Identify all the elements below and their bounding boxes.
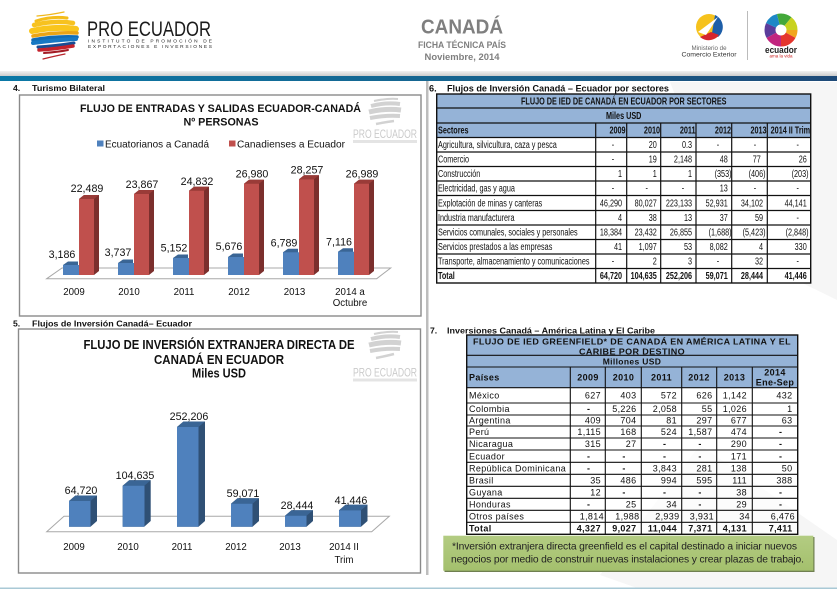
table: greenfield FDI by destination: 11,044 xyxy=(648,523,677,533)
axis labels: 2010 xyxy=(117,542,139,553)
table: greenfield FDI by destination: Países xyxy=(469,372,500,382)
chart title: Nº PERSONAS xyxy=(184,116,259,128)
table: greenfield FDI by destination: 3,931 xyxy=(690,511,714,521)
axis labels: 2009 xyxy=(63,542,85,553)
table: greenfield FDI by destination: 63 xyxy=(782,416,792,426)
axis labels: 2013 xyxy=(284,287,305,298)
table: greenfield FDI by destination: 297 xyxy=(696,416,712,426)
table: greenfield FDI by destination: - xyxy=(663,439,666,449)
table: FDI by sector: 32 xyxy=(755,255,763,267)
table: greenfield FDI by destination: 2010 xyxy=(613,372,634,382)
axis labels: 2013 xyxy=(279,542,301,553)
data labels: 26,989 xyxy=(346,168,378,180)
table: FDI by sector: - xyxy=(682,182,684,194)
table: FDI by sector: Industria manufacturera xyxy=(438,212,515,223)
axis labels: 2014 II xyxy=(329,542,359,553)
data labels: 3,186 xyxy=(49,249,75,261)
table: greenfield FDI by destination: - xyxy=(587,451,590,461)
table: greenfield FDI by destination: 4,131 xyxy=(723,523,747,533)
table: greenfield FDI by destination: - xyxy=(698,439,702,449)
table: greenfield FDI by destination: 2,058 xyxy=(653,404,677,414)
table: greenfield FDI by destination: 12 xyxy=(590,487,601,497)
table: greenfield FDI by destination: - xyxy=(663,451,666,461)
table: greenfield FDI by destination: 524 xyxy=(661,427,677,437)
table: FDI by sector: - xyxy=(797,182,799,194)
callout: greenfield definition: negocios por medio de construir nuevas instalaciones y crear plazas de trabajo. xyxy=(451,554,804,566)
table: FDI by sector: 1 xyxy=(688,168,692,179)
table: greenfield FDI by destination: - xyxy=(622,487,626,497)
legend xyxy=(97,138,345,150)
table: FDI by sector: 59,071 xyxy=(706,270,728,281)
logo: Ecuador ama la vida: ecuador xyxy=(765,45,797,55)
heading 7: Inversiones Canadá – América Latina y El Caribe xyxy=(447,326,655,336)
watermark logo: PRO ECUADOR xyxy=(353,368,417,380)
table: FDI by sector: 3 xyxy=(688,255,692,267)
data labels: 3,737 xyxy=(105,247,131,259)
data labels: 23,867 xyxy=(126,179,158,191)
heading 4: 4. xyxy=(13,83,20,93)
table: FDI by sector: (203) xyxy=(792,168,809,179)
logo tagline: EXPORTACIONES E INVERSIONES xyxy=(88,44,212,50)
table: FDI by sector: Agricultura, silvicultura, caza y pesca xyxy=(438,139,557,150)
background watermark xyxy=(600,82,837,589)
table: greenfield FDI by destination: Brasil xyxy=(469,475,494,485)
axis labels: 2011 xyxy=(174,287,194,298)
table: FDI by sector: 26 xyxy=(799,153,807,165)
table: greenfield FDI by destination: 486 xyxy=(620,475,636,485)
table: greenfield FDI by destination: Honduras xyxy=(469,499,511,509)
axis labels: Trim xyxy=(334,555,354,566)
table: FDI by sector: - xyxy=(754,139,756,150)
table: greenfield FDI by destination: 1,587 xyxy=(688,427,712,437)
table: greenfield FDI by destination: 627 xyxy=(585,390,601,400)
table: FDI by sector: 13 xyxy=(720,182,728,194)
table: FDI by sector: Transporte, almacenamiento y comunicaciones xyxy=(438,255,590,267)
table: FDI by sector: 26,855 xyxy=(670,226,692,238)
table: greenfield FDI by destination: - xyxy=(779,439,782,449)
table: greenfield FDI by destination: 6,476 xyxy=(771,511,795,521)
axis labels: 2010 xyxy=(118,287,140,298)
table: greenfield FDI by destination: 171 xyxy=(731,451,747,461)
table: FDI by sector: 53 xyxy=(684,241,692,252)
bar chart: FDI xyxy=(69,422,368,527)
table: FDI by sector: - xyxy=(797,212,799,223)
table: greenfield FDI by destination: - xyxy=(698,499,702,509)
axis labels xyxy=(63,287,367,309)
table: greenfield FDI by destination: 281 xyxy=(696,463,712,473)
table: FDI by sector: 80,027 xyxy=(635,197,657,209)
table: greenfield FDI by destination: 2014 xyxy=(764,368,786,378)
data labels: 22,489 xyxy=(71,183,103,195)
watermark logo: PRO ECUADOR xyxy=(353,129,417,141)
table: FDI by sector: (5,423) xyxy=(743,226,766,238)
table: greenfield FDI by destination: Colombia xyxy=(469,404,510,414)
table: greenfield FDI by destination: 2012 xyxy=(688,372,710,382)
table: greenfield FDI by destination: México xyxy=(469,390,500,400)
table: greenfield FDI by destination: 111 xyxy=(732,475,747,485)
table: greenfield FDI by destination: 2011 xyxy=(651,372,672,382)
axis labels: 2011 xyxy=(172,542,192,553)
callout: greenfield definition xyxy=(443,536,814,572)
table: greenfield FDI by destination: 25 xyxy=(626,499,636,509)
table: FDI by sector: - xyxy=(612,255,614,267)
data labels: 5,152 xyxy=(161,242,187,254)
table: greenfield FDI by destination: 2009 xyxy=(577,372,599,382)
table: greenfield FDI by destination: - xyxy=(779,451,782,461)
logo: Pro Ecuador xyxy=(32,12,212,59)
data labels: 41,446 xyxy=(335,495,367,507)
table: greenfield FDI by destination: 2013 xyxy=(724,372,745,382)
logo wordmark: PRO ECUADOR xyxy=(87,18,211,41)
table: greenfield FDI by destination: 704 xyxy=(620,416,636,426)
table: FDI by sector: 2 xyxy=(653,255,657,267)
table: greenfield FDI by destination: 474 xyxy=(731,427,747,437)
table: FDI by sector: 20 xyxy=(649,139,657,150)
table: greenfield FDI by destination: - xyxy=(779,487,782,497)
table: greenfield FDI by destination: 1,115 xyxy=(577,427,601,437)
data labels: 24,832 xyxy=(181,176,213,188)
data labels: 26,980 xyxy=(236,168,268,180)
table: FDI by sector: Sectores xyxy=(438,124,469,136)
table: greenfield FDI by destination: 1,026 xyxy=(723,404,747,414)
table: greenfield FDI by destination: - xyxy=(622,451,626,461)
table: FDI by sector: 4 xyxy=(618,212,622,223)
table: greenfield FDI by destination: 432 xyxy=(776,390,792,400)
table: FDI by sector: 38 xyxy=(649,212,657,223)
table: greenfield FDI by destination: Ene-Sep xyxy=(756,378,794,388)
heading 5: Flujos de Inversión Canadá– Ecuador xyxy=(32,318,193,328)
table: greenfield FDI by destination: 1,814 xyxy=(580,511,604,521)
table: greenfield FDI by destination: 2,939 xyxy=(655,511,680,521)
table: FDI by sector: - xyxy=(612,139,614,150)
chart title: FLUJO DE ENTRADAS Y SALIDAS ECUADOR-CANADÁ xyxy=(80,102,361,115)
table: FDI by sector: 2009 xyxy=(609,124,626,136)
table: FDI by sector: Servicios comunales, sociales y personales xyxy=(438,226,578,238)
table: FDI by sector: 64,720 xyxy=(600,270,622,281)
table: greenfield FDI by destination: Ecuador xyxy=(469,451,505,461)
table: greenfield FDI by destination: 29 xyxy=(736,499,747,509)
table: FDI by sector: - xyxy=(754,182,756,194)
table: greenfield FDI by destination: - xyxy=(587,404,590,414)
table: greenfield FDI by destination: 290 xyxy=(731,439,747,449)
table: greenfield FDI by destination: 138 xyxy=(731,463,747,473)
table: FDI by sector: - xyxy=(646,182,648,194)
table: greenfield FDI by destination: 27 xyxy=(626,439,636,449)
table: greenfield FDI by destination: FLUJO DE IED GREENFIELD* DE CANADÁ EN AMÉRICA LATINA Y EL xyxy=(473,336,791,346)
table: greenfield FDI by destination: 9,027 xyxy=(612,523,636,533)
table: FDI by sector: 34,102 xyxy=(741,197,763,209)
table: FDI by sector: (2,848) xyxy=(786,226,809,238)
logo: Ministerio de Comercio Exterior xyxy=(682,14,737,58)
watermark logo xyxy=(353,99,417,143)
header title: CANADÁ xyxy=(421,16,503,38)
chart title xyxy=(84,337,354,380)
table: greenfield FDI by destination: - xyxy=(779,499,782,509)
panel: tourism chart xyxy=(20,95,421,316)
header title xyxy=(418,16,506,62)
chart floor xyxy=(47,516,389,532)
icon: striped globe xyxy=(32,12,77,59)
axis labels: 2009 xyxy=(63,287,85,298)
table: greenfield FDI by destination: Perú xyxy=(469,427,489,437)
table: greenfield FDI by destination: CARIBE POR DESTINO xyxy=(579,346,685,356)
table: greenfield FDI by destination: Guyana xyxy=(469,487,503,497)
table: FDI by sector: 1,097 xyxy=(639,241,657,252)
data labels: 252,206 xyxy=(170,411,208,423)
table: FDI by sector: 104,635 xyxy=(631,270,657,281)
heading 4: Turismo Bilateral xyxy=(32,83,105,93)
table: FDI by sector: 330 xyxy=(795,241,807,252)
heading 6: Flujos de Inversión Canadá – Ecuador por sectores xyxy=(447,84,669,94)
table: greenfield FDI by destination: - xyxy=(587,463,590,473)
table: FDI by sector: 223,133 xyxy=(666,197,692,209)
table: greenfield FDI by destination: 409 xyxy=(585,416,601,426)
table: greenfield FDI by destination: - xyxy=(587,499,590,509)
table: greenfield FDI by destination: Total xyxy=(469,523,492,533)
axis labels: 2012 xyxy=(225,542,247,553)
table: greenfield FDI by destination: 35 xyxy=(590,475,601,485)
table: FDI by sector: 13 xyxy=(684,212,692,223)
table: greenfield FDI by destination: Millones USD xyxy=(603,356,661,366)
watermark logo xyxy=(353,332,417,382)
table: greenfield FDI by destination: 7,411 xyxy=(769,523,792,533)
table: greenfield FDI by destination: Argentina xyxy=(469,416,511,426)
table: greenfield FDI by destination: - xyxy=(698,451,702,461)
logo: Ministerio de Comercio Exterior: Ministerio de xyxy=(691,45,727,52)
bar chart: tourism xyxy=(63,175,374,275)
icon: colour wheel xyxy=(770,19,792,41)
table: greenfield FDI by destination: 55 xyxy=(702,404,712,414)
axis labels xyxy=(63,542,359,566)
table: greenfield FDI by destination: 403 xyxy=(620,390,636,400)
table: FDI by sector: FLUJO DE IED DE CANADÁ EN ECUADOR POR SECTORES xyxy=(521,94,727,107)
table: greenfield FDI by destination: 3,843 xyxy=(653,463,677,473)
axis labels: 2012 xyxy=(228,287,250,298)
table: greenfield FDI by destination: 1,142 xyxy=(723,390,747,400)
table: FDI by sector: 41,446 xyxy=(785,270,807,281)
table: greenfield FDI by destination: 1 xyxy=(787,404,792,414)
table: greenfield FDI by destination: 626 xyxy=(696,390,712,400)
table: FDI by sector xyxy=(437,94,811,283)
table: greenfield FDI by destination: Nicaragua xyxy=(469,439,513,449)
table: greenfield FDI by destination: 34 xyxy=(666,499,677,509)
header band xyxy=(0,71,837,81)
table: FDI by sector: 41 xyxy=(614,241,622,252)
data labels: 28,257 xyxy=(291,164,323,176)
table: FDI by sector: 52,931 xyxy=(706,197,728,209)
legend: Canadienses a Ecuador xyxy=(237,138,345,150)
table: greenfield FDI by destination: 81 xyxy=(666,416,677,426)
table: FDI by sector: Miles USD xyxy=(606,110,641,121)
table: FDI by sector: 4 xyxy=(759,241,763,252)
table: FDI by sector: 77 xyxy=(753,153,761,165)
legend: Ecuatorianos a Canadá xyxy=(105,138,209,150)
table: FDI by sector: 0.3 xyxy=(682,139,692,150)
table: greenfield FDI by destination: 168 xyxy=(620,427,636,437)
table: greenfield FDI by destination: 1,988 xyxy=(615,511,640,521)
panel: investment chart xyxy=(18,329,420,573)
table: FDI by sector: - xyxy=(797,255,799,267)
heading 7: 7. xyxy=(430,326,437,336)
heading 5: 5. xyxy=(13,318,20,328)
data labels xyxy=(49,164,378,261)
table: FDI by sector: 23,432 xyxy=(635,226,657,238)
table: greenfield FDI by destination: 38 xyxy=(736,487,747,497)
table: FDI by sector: 2012 xyxy=(715,124,731,136)
table: greenfield FDI by destination: - xyxy=(663,487,666,497)
table: FDI by sector: Explotación de minas y canteras xyxy=(438,197,542,209)
chart floor xyxy=(47,268,391,279)
table: greenfield FDI by destination: 572 xyxy=(661,390,677,400)
axis labels: Octubre xyxy=(333,298,367,309)
table: FDI by sector: - xyxy=(612,153,614,165)
table: FDI by sector: 252,206 xyxy=(666,270,692,281)
header title: Noviembre, 2014 xyxy=(424,52,500,62)
table: greenfield FDI by destination: - xyxy=(622,463,626,473)
table: FDI by sector: 18,384 xyxy=(600,226,622,238)
heading 6: 6. xyxy=(429,84,437,94)
table: FDI by sector: - xyxy=(797,139,799,150)
table: greenfield FDI by destination: 595 xyxy=(696,475,712,485)
logo tagline: INSTITUTO DE PROMOCIÓN DE xyxy=(88,38,212,44)
table: greenfield FDI by destination: 677 xyxy=(731,416,747,426)
data labels: 59,071 xyxy=(227,488,259,500)
table: greenfield FDI by destination: 50 xyxy=(782,463,792,473)
data labels: 6,789 xyxy=(271,238,297,250)
table: FDI by sector: 2,148 xyxy=(674,153,692,165)
logo tagline xyxy=(88,38,212,50)
table: FDI by sector: 44,141 xyxy=(785,197,807,209)
table: FDI by sector: 2010 xyxy=(644,124,660,136)
table: FDI by sector: 2011 xyxy=(680,124,696,136)
table: FDI by sector: 59 xyxy=(755,212,763,223)
table: greenfield FDI by destination: 315 xyxy=(585,439,601,449)
table: FDI by sector: Total xyxy=(438,270,455,281)
table: FDI by sector: (406) xyxy=(749,168,766,179)
table: FDI by sector: 8,082 xyxy=(710,241,728,252)
chart title: FLUJO DE INVERSIÓN EXTRANJERA DIRECTA DE xyxy=(84,337,354,352)
table: greenfield FDI by destination: 5,226 xyxy=(612,404,636,414)
table: greenfield FDI by destination: Otros países xyxy=(469,511,524,521)
table: FDI by sector: 19 xyxy=(649,153,657,165)
callout: greenfield definition: *Inversión extranjera directa greenfield es el capital destinado a iniciar nuevos xyxy=(452,542,797,552)
table: FDI by sector: Servicios prestados a las empresas xyxy=(438,241,552,252)
axis labels: 2014 a xyxy=(335,287,365,298)
table: FDI by sector: Comercio xyxy=(438,153,469,165)
table: FDI by sector: 1 xyxy=(653,168,657,179)
logo: Ministerio de Comercio Exterior: Comercio Exterior xyxy=(682,52,737,58)
data labels: 7,116 xyxy=(326,236,352,248)
table: FDI by sector: 46,290 xyxy=(600,197,622,209)
table: greenfield FDI by destination: 34 xyxy=(739,511,750,521)
data labels: 64,720 xyxy=(65,485,97,497)
data labels: 5,676 xyxy=(216,241,242,253)
table: FDI by sector: 28,444 xyxy=(741,270,763,281)
logo: Ecuador ama la vida: ama la vida xyxy=(769,54,793,58)
data labels: 104,635 xyxy=(116,470,154,482)
table: greenfield FDI by destination: 388 xyxy=(776,475,792,485)
table: FDI by sector: 37 xyxy=(720,212,728,223)
table: FDI by sector: Construcción xyxy=(438,168,480,179)
table: FDI by sector: 2014 II Trim xyxy=(771,124,810,136)
table: greenfield FDI by destination: República Dominicana xyxy=(469,463,566,473)
table: FDI by sector: 2013 xyxy=(750,124,767,136)
chart title: CANADÁ EN ECUADOR xyxy=(154,352,284,367)
table: greenfield FDI by destination: 994 xyxy=(661,475,677,485)
table: greenfield FDI by destination: 4,327 xyxy=(577,523,601,533)
table: greenfield FDI by destination: 7,371 xyxy=(688,523,712,533)
logo: Ecuador ama la vida xyxy=(765,19,797,58)
table: FDI by sector: - xyxy=(717,139,719,150)
chart title: Miles USD xyxy=(192,366,246,380)
table: FDI by sector: Electricidad, gas y agua xyxy=(438,182,515,194)
table: FDI by sector: (353) xyxy=(715,168,732,179)
icon: ministry emblem xyxy=(696,14,723,40)
table: FDI by sector: (1,688) xyxy=(709,226,732,238)
header title: FICHA TÉCNICA PAÍS xyxy=(418,40,506,50)
table: FDI by sector: - xyxy=(717,255,719,267)
table: greenfield FDI by destination: - xyxy=(779,427,782,437)
chart title xyxy=(80,102,361,128)
data labels: 28,444 xyxy=(281,500,313,512)
table: greenfield FDI by destination: - xyxy=(698,487,702,497)
table: FDI by sector: 1 xyxy=(618,168,622,179)
table: FDI by sector: 48 xyxy=(720,153,728,165)
data labels xyxy=(65,411,367,512)
table: greenfield FDI by destination xyxy=(467,335,798,534)
table: FDI by sector: - xyxy=(612,182,614,194)
